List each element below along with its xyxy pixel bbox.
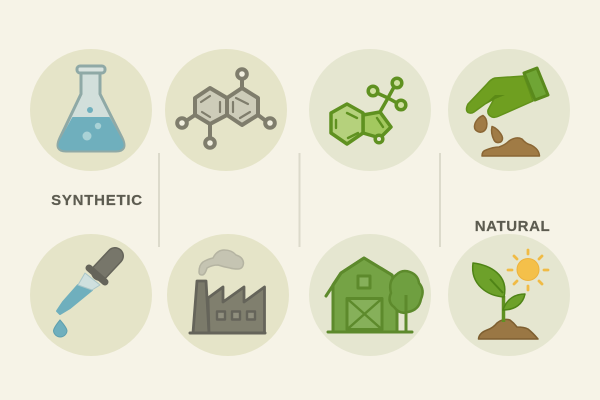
panel: factory	[167, 234, 289, 356]
icon: drop	[54, 320, 67, 337]
icon: seeds	[474, 116, 503, 143]
icon: dropper	[57, 256, 115, 314]
icon: sun	[508, 250, 548, 290]
icon: smoke	[199, 250, 244, 275]
icon: soil mound	[478, 319, 538, 339]
panel: flask	[30, 49, 152, 171]
icon: gloved hand	[466, 68, 548, 117]
heading: synthetic: SYNTHETIC	[51, 192, 143, 209]
icon: factory	[190, 281, 265, 333]
panel: barn	[309, 234, 431, 356]
heading: natural: NATURAL	[475, 218, 550, 235]
icon: tree	[390, 271, 423, 332]
panel: hand sowing seeds	[448, 49, 570, 171]
panel: green molecule	[309, 49, 431, 171]
panel: dropper	[30, 234, 152, 356]
icon: grey molecule	[177, 69, 275, 148]
icon: barn	[326, 258, 412, 332]
icon: soil mound	[482, 138, 540, 156]
icon: sprout	[473, 263, 525, 322]
icon: green molecule	[331, 78, 406, 144]
icon: flask	[58, 66, 124, 151]
panel: grey molecule	[165, 49, 287, 171]
panel: sprout and sun	[448, 234, 570, 356]
